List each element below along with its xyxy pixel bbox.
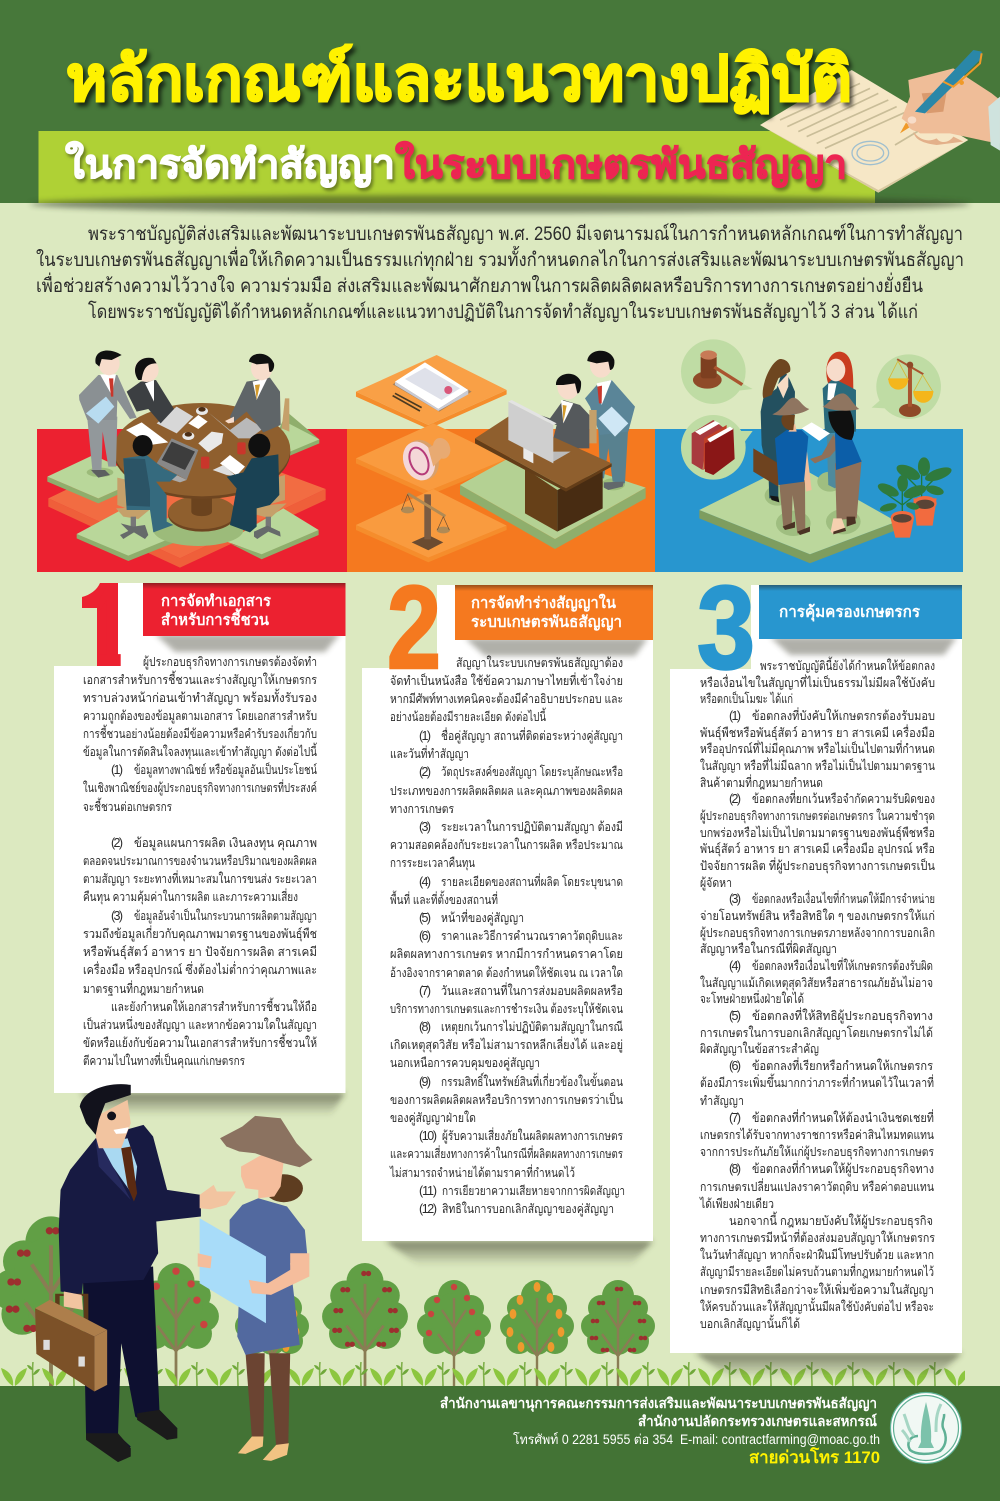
- panel 2 body text: บริการทางการเกษตรและการชำระเงิน ต้องระบุให้ชัดเจน: [390, 1002, 623, 1017]
- seated man, right: [227, 434, 287, 539]
- panel 1 body text: มาตรฐานที่กฎหมายกำหนด: [83, 980, 204, 996]
- panel 3 body text: พระราชบัญญัตินี้ยังได้กำหนดให้ข้อตกลง: [760, 656, 935, 673]
- panel 2 body text: [389, 656, 625, 1217]
- panel 3 body text: ได้เพียงฝ่ายเดียว: [699, 1197, 774, 1211]
- papers and laptops on table: [126, 407, 263, 482]
- panel 3 body text: หรือเงื่อนไขในสัญญาที่ไม่เป็นธรรมไม่มีผลใช้บังคับ: [700, 674, 935, 690]
- seated man, left: [116, 435, 177, 539]
- panel 1 body text: หรือพันธุ์สัตว์ อาหาร ยา ปัจจัยการผลิต สารเคมี: [83, 945, 317, 960]
- contract paper and writing hand: [760, 50, 1000, 193]
- panel 3 body text: พันธุ์พืชหรือพันธุ์สัตว์ อาหาร ยา สารเคมี เครื่องมือ: [700, 724, 935, 741]
- illustration: desk workers and farmers: [460, 339, 953, 563]
- panel 3 body text: ผู้จัดหา: [700, 876, 732, 891]
- document platform: [356, 355, 507, 429]
- panel 2 body text: หากมีศัพท์ทางเทคนิคจะต้องมีคำอธิบายประกอบ และ: [390, 692, 623, 706]
- panel 3 body text: (4): [729, 959, 741, 973]
- panel 1 body text: เอกสารสำหรับการชี้ชวนและร่างสัญญาให้เกษตรกร: [83, 670, 317, 687]
- face: [241, 1155, 284, 1198]
- panel 1 body text: ขัดหรือแย้งกับข้อความในเอกสารสำหรับการชี้ชวนให้: [83, 1033, 317, 1050]
- panel 3 body text: จากการประกันภัยให้แก่ผู้ประกอบธุรกิจทางการเกษตร: [700, 1145, 934, 1160]
- panel 3 body text: ต้องมีภาระเพิ่มขึ้นมากกว่าภาระที่กำหนดไว้ในเวลาที่: [700, 1073, 934, 1090]
- panel 3 body text: [699, 656, 935, 1331]
- panel 3 body text: (8): [729, 1162, 741, 1176]
- panel 3 body text: เกษตรกรได้รับจากทางราชการหรือค่าสินไหมทดแทน: [700, 1128, 934, 1142]
- pear tree: [500, 1280, 574, 1386]
- panel 2 body text: (3): [419, 820, 431, 834]
- title: หลักเกณฑ์และแนวทางปฏิบัติ: [66, 44, 852, 114]
- panel 2 body text: (6): [419, 929, 431, 943]
- panel 2 header: [455, 585, 653, 656]
- panel 3 body text: (5): [729, 1009, 741, 1023]
- panel 2 body text: (11): [419, 1184, 437, 1198]
- orange under-platform: [48, 435, 326, 568]
- face: [80, 1084, 131, 1148]
- panel 3 body text: (7): [729, 1111, 741, 1125]
- panel 2 body text: จัดทำเป็นหนังสือ ใช้ข้อความภาษาไทยที่เข้าใจง่าย: [390, 672, 623, 688]
- gesturing hand: [200, 1185, 236, 1209]
- panel 3 body text: หรืออุปกรณ์ที่ไม่มีคุณภาพ หรือไม่เป็นไปตามที่กำหนด: [700, 740, 935, 757]
- panel 3 body text: นอกจากนี้ กฎหมายบังคับให้ผู้ประกอบธุรกิจ: [729, 1211, 933, 1229]
- apple tree: [417, 1280, 491, 1386]
- panel 2 body text: อย่างน้อยต้องมีรายละเอียด ดังต่อไปนี้: [390, 707, 546, 724]
- red-haired woman: [823, 352, 856, 488]
- panel 2 body text: (1): [419, 729, 431, 743]
- panel 3 body text: จ่ายโอนทรัพย์สิน หรือสิทธิใด ๆ ของเกษตรกรให้แก่: [700, 908, 935, 923]
- businessman with briefcase: [35, 1084, 236, 1462]
- panel 2 body text: ราคาและวิธีการคำนวณราคาวัตถุดิบและ: [441, 929, 623, 944]
- number 2: 2: [387, 562, 441, 694]
- panel 1 body text: การชี้ชวนอย่างน้อยต้องมีข้อความหรือคำรับรองเกี่ยวกับ: [83, 724, 317, 741]
- panel 2 body text: (7): [419, 984, 431, 998]
- speech bubble: gavel: [681, 339, 753, 404]
- cherry tree: [581, 1280, 655, 1386]
- male farmer: [772, 398, 812, 535]
- potted plants: [876, 457, 953, 538]
- panel 3 header: การคุ้มครองเกษตรกร: [779, 603, 921, 622]
- colour bands behind illustrations: [37, 429, 963, 572]
- panel 2 header: การจัดทำร่างสัญญาใน: [471, 593, 616, 612]
- man in grey suit, right: [225, 354, 289, 432]
- panel 2 body text: พื้นที่ และที่ตั้งของสถานที่: [390, 890, 498, 907]
- panel 2 body text: (2): [419, 765, 431, 779]
- panel 1 body text: ตีความไปในทางที่เป็นคุณแก่เกษตรกร: [83, 1052, 245, 1069]
- panel 3 body text: ข้อตกลงที่ให้สิทธิผู้ประกอบธุรกิจทาง: [752, 1007, 933, 1024]
- female farmer: [810, 393, 862, 534]
- blue paper: [200, 1218, 266, 1323]
- panel 2 body text: ชื่อคู่สัญญา สถานที่ติดต่อระหว่างคู่สัญญา: [441, 727, 623, 744]
- panel 1 body text: (2): [111, 836, 123, 850]
- panel 2 body text: (12): [419, 1202, 437, 1216]
- panel 1 body text: ตลอดจนประมาณการของจำนวนหรือปริมาณของผลิตผล: [83, 854, 317, 868]
- cherry tree: [322, 1263, 408, 1386]
- orchard trees: [0, 1216, 655, 1386]
- footer text: สายด่วนโทร 1170: [749, 1447, 880, 1467]
- speech bubble: law books: [681, 415, 753, 480]
- panel 3 body text: (1): [729, 709, 741, 723]
- apple tree: [133, 1263, 219, 1386]
- panel 3 body text: (3): [729, 892, 741, 906]
- panel 1 body text: ตามสัญญา ระยะทางที่เหมาะสมในการขนส่ง ระยะเวลา: [83, 870, 317, 886]
- footer text: สำนักงานเลขานุการคณะกรรมการส่งเสริมและพัฒนาระบบเกษตรพันธสัญญา: [440, 1395, 877, 1412]
- panel shadows: [80, 1093, 962, 1378]
- panel 1 body text: [83, 655, 317, 1069]
- panel 1 body text: จะชี้ชวนต่อเกษตรกร: [83, 797, 172, 814]
- shoes: [86, 1410, 177, 1462]
- panel 1 body text: ข้อมูลอันจำเป็นในกระบวนการผลิตตามสัญญา: [134, 908, 317, 924]
- shirt and tie: [96, 1138, 137, 1202]
- number 1: [82, 561, 122, 691]
- illustration: meeting around round table and orange platforms: [47, 350, 507, 568]
- panel 3 body text: (6): [729, 1059, 741, 1073]
- panel 3 body text: ข้อตกลงที่กำหนดให้ผู้ประกอบธุรกิจทาง: [752, 1160, 934, 1177]
- panel 2 body text: เหตุยกเว้นการไม่ปฏิบัติตามสัญญาในกรณี: [441, 1020, 623, 1035]
- panel 1 body text: ในเชิงพาณิชย์ของผู้ประกอบธุรกิจทางการเกษตรที่ประสงค์: [83, 779, 317, 796]
- panel 2 body text: (8): [419, 1020, 431, 1034]
- panel 2 body text: วันและสถานที่ในการส่งมอบผลิตผลหรือ: [441, 982, 623, 998]
- panel 1 body text: ข้อมูลทางพาณิชย์ หรือข้อมูลอันเป็นประโยชน์: [134, 762, 317, 778]
- seated man at desk: [535, 374, 597, 453]
- panel 2 body text: การระยะเวลาคืนทุน: [390, 856, 475, 871]
- panel 2 body text: (4): [419, 875, 431, 889]
- arms: [198, 1253, 309, 1295]
- panel 2 body text: รายละเอียดของสถานที่ผลิต โดยระบุขนาด: [441, 873, 623, 890]
- panel 3 body text: ข้อตกลงที่กำหนดให้ต้องนำเงินชดเชยที่: [752, 1109, 934, 1125]
- band shadow: [30, 195, 970, 213]
- hat: [220, 1116, 313, 1167]
- panel 3 body text: ผิดสัญญาในข้อสาระสำคัญ: [700, 1042, 819, 1056]
- desk platform: [460, 448, 646, 549]
- panel 3 body text: ในสัญญาแม้เกิดเหตุสุดวิสัยหรือสาธารณภัยอันไม่อาจ: [700, 976, 933, 991]
- footer text: สำนักงานปลัดกระทรวงเกษตรและสหกรณ์: [638, 1413, 877, 1429]
- hair bun: [265, 1174, 303, 1202]
- panel 2 body text: วัตถุประสงค์ของสัญญา โดยระบุลักษณะหรือ: [441, 764, 623, 780]
- panel 3 body text: การเกษตรเปลี่ยนแปลงราคาวัตถุดิบ หรือค่าตอบแทน: [700, 1178, 934, 1195]
- panel 3 body text: สัญญามีรายละเอียดไม่ครบถ้วนตามที่กฎหมายกำหนดไว้: [700, 1263, 934, 1279]
- panel 2 body text: และวันที่ทำสัญญา: [390, 745, 469, 761]
- farmer woman with blue paper: [198, 1116, 313, 1461]
- footer text: [440, 1395, 880, 1467]
- panel 2 body text: ไม่สามารถจำหน่ายได้ตามราคาที่กำหนดไว้: [389, 1164, 575, 1180]
- panel 3 body text: หรือตกเป็นโมฆะ ได้แก่: [700, 691, 793, 706]
- panel 2 body text: ผลิตผลทางการเกษตร หากมีการกำหนดราคาโดย: [390, 946, 623, 961]
- briefcase: [35, 1292, 107, 1392]
- panel 1 body text: เครื่องมือ หรืออุปกรณ์ ซึ่งต้องไม่ต่ำกว่าคุณภาพและ: [83, 961, 317, 978]
- panel 2 header: ระบบเกษตรพันธสัญญา: [471, 614, 622, 631]
- panel 3 header: [759, 585, 962, 655]
- seedling row: [0, 1362, 965, 1386]
- panel 3 body text: บอกเลิกสัญญานั้นก็ได้: [700, 1314, 800, 1331]
- jacket: [59, 1125, 201, 1295]
- panel 3 body text: ทำสัญญา: [700, 1094, 744, 1108]
- panel 2 body text: ความสอดคล้องกับระยะเวลาในการผลิต หรือประมาณ: [390, 838, 623, 852]
- panel 3 body text: ในวันทำสัญญา หากก็จะฝ่าฝืนมีโทษปรับด้วย และหาก: [700, 1247, 934, 1262]
- subtitle white part: ในการจัดทำสัญญา: [65, 141, 395, 188]
- panel 3: farmer protection: [670, 562, 962, 1353]
- panel 3 body text: สัญญาหรือในกรณีที่ผิดสัญญา: [700, 940, 837, 956]
- panel 2 body text: (5): [419, 911, 431, 925]
- panel 1 header: สำหรับการชี้ชวน: [161, 608, 269, 629]
- panel 3 body text: บกพร่องหรือไม่เป็นไปตามมาตรฐานของพันธุ์พืชหรือ: [700, 825, 935, 841]
- panel 3 body text: สินค้าตามที่กฎหมายกำหนด: [700, 774, 823, 790]
- stamp platform: [356, 423, 507, 496]
- panel 3 sheet: [670, 585, 962, 1353]
- footer band: [0, 1386, 1000, 1501]
- standing man with folder: [79, 350, 137, 478]
- round table: [114, 403, 290, 532]
- speech bubble: gold scales: [872, 354, 941, 419]
- panel 1 header: การจัดทำเอกสาร: [161, 592, 272, 610]
- footer text: โทรศัพท์ 0 2281 5955 ต่อ 354 E-mail: contractfarming@moac.go.th: [513, 1431, 880, 1447]
- panel 1 body text: ผู้ประกอบธุรกิจทางการเกษตรต้องจัดทำ: [143, 655, 317, 670]
- scales platform: [356, 489, 507, 562]
- businesswoman with briefcase: [753, 359, 795, 502]
- panel 2 body text: สัญญาในระบบเกษตรพันธสัญญาต้อง: [456, 656, 623, 670]
- panel 2 body text: หน้าที่ของคู่สัญญา: [441, 909, 524, 926]
- farmers platform: [699, 463, 897, 563]
- panel 2 body text: สิทธิในการบอกเลิกสัญญาของคู่สัญญา: [442, 1202, 614, 1217]
- panel 2 body text: ผู้รับความเสี่ยงภัยในผลิตผลทางการเกษตร: [442, 1127, 623, 1144]
- panel 1 body text: ทราบล่วงหน้าก่อนเข้าทำสัญญา พร้อมทั้งรับรอง: [83, 688, 317, 705]
- panel 1: documents for solicitation: [54, 561, 346, 1093]
- panel 3 body text: (2): [729, 792, 741, 806]
- panel 2 body text: กรรมสิทธิ์ในทรัพย์สินที่เกี่ยวข้องในขั้นตอน: [441, 1072, 623, 1089]
- trousers: [83, 1267, 177, 1462]
- panel 3 body text: ข้อตกลงที่บังคับให้เกษตรกรต้องรับมอบ: [752, 707, 935, 723]
- panel 2 body text: เกิดเหตุสุดวิสัย หรือไม่สามารถหลีกเลี่ยงได้ และอยู่: [390, 1036, 623, 1053]
- header band: [0, 0, 1000, 203]
- panel 1 sheet: [54, 583, 346, 1093]
- computer desk: [475, 400, 612, 532]
- panel 2 body text: (9): [419, 1075, 431, 1089]
- panel 1 header: [143, 583, 346, 652]
- panel 1 body text: และยังกำหนดให้เอกสารสำหรับการชี้ชวนให้ถือ: [111, 997, 317, 1014]
- panel 1: documents for solicitation: 1: [96, 561, 122, 691]
- orange tree behind farmer: [235, 1280, 309, 1386]
- panel 1 body text: เป็นส่วนหนึ่งของสัญญา และหากข้อความใดในสัญญา: [83, 1016, 317, 1032]
- panel 2 sheet: [362, 585, 653, 1241]
- panel 2 body text: ของการผลิตผลิตผลหรือบริการทางการเกษตรว่าเป็น: [390, 1092, 623, 1107]
- panel 2 body text: ทางการเกษตร: [390, 802, 454, 816]
- panel 3 body text: ข้อตกลงที่ยกเว้นหรือจำกัดความรับผิดของ: [752, 790, 935, 806]
- intro paragraph: [36, 223, 964, 323]
- panel 1 body text: คืนทุน ความคุ้มค่าในการผลิต และภาระความเสี่ยง: [83, 888, 298, 905]
- panel 1 body text: ข้อมูลแผนการผลิต เงินลงทุน คุณภาพ: [134, 836, 317, 851]
- panel 2: drafting the contract: [362, 562, 653, 1241]
- panel 1 body text: ความถูกต้องของข้อมูลตามเอกสาร โดยเอกสารสำหรับ: [83, 708, 317, 724]
- green platforms: [47, 412, 319, 561]
- subtitle red part: ในระบบเกษตรพันธสัญญา: [395, 141, 847, 188]
- panel 3 body text: ข้อตกลงหรือเงื่อนไขที่กำหนดให้มีการจำหน่าย: [752, 890, 935, 906]
- cherry tree far left: [0, 1216, 110, 1386]
- standing man at desk: [585, 351, 635, 490]
- dress: [230, 1198, 307, 1355]
- ministry seal: [890, 1392, 962, 1464]
- panel 1 body text: รวมถึงข้อมูลเกี่ยวกับคุณภาพมาตรฐานของพันธุ์พืช: [83, 925, 317, 942]
- panel 1 body text: ข้อมูลในการตัดสินใจลงทุนและเข้าทำสัญญา ดังต่อไปนี้: [83, 742, 317, 760]
- panel 3 body text: ผู้ประกอบธุรกิจทางการเกษตรต่อเกษตรกร ในความชำรุด: [700, 809, 935, 824]
- panel 2 body text: อ้างอิงจากราคาตลาด ต้องกำหนดให้ชัดเจน ณ เวลาใด: [390, 966, 623, 980]
- panel 3 body text: การเกษตรในการบอกเลิกสัญญาโดยเกษตรกรไม่ได้: [700, 1025, 933, 1040]
- panel 2 body text: (10): [419, 1129, 437, 1143]
- panel 1 body text: (1): [111, 763, 123, 777]
- panel 2 body text: และความเสี่ยงทางการค้าในกรณีที่ผลิตผลทางการเกษตร: [390, 1145, 623, 1161]
- panel 3 body text: พันธุ์สัตว์ อาหาร ยา สารเคมี เครื่องมือ อุปกรณ์ หรือ: [700, 840, 935, 857]
- panel 2 body text: ระยะเวลาในการปฏิบัติตามสัญญา ต้องมี: [441, 820, 623, 834]
- number 3: 3: [697, 562, 755, 694]
- panel 2 body text: ประเภทของการผลิตผลิตผล และคุณภาพของผลิตผล: [390, 784, 623, 799]
- subtitle: [65, 141, 847, 188]
- legs: [238, 1353, 290, 1461]
- panel 3 body text: จะโทษฝ่ายหนึ่งฝ่ายใดได้: [700, 990, 804, 1006]
- panel 3 body text: ข้อตกลงหรือเงื่อนไขที่ให้เกษตรกรต้องรับผิด: [752, 957, 933, 973]
- subtitle bar: [38, 131, 875, 203]
- panel 3 body text: ทางการเกษตรมีหน้าที่ต้องส่งมอบสัญญาให้เกษตรกร: [700, 1229, 935, 1245]
- panel 3 body text: เกษตรกรมีสิทธิเลือกว่าจะให้เพิ่มข้อความในสัญญา: [700, 1281, 934, 1297]
- panel 2 body text: การเยียวยาความเสียหายจากการผิดสัญญา: [442, 1184, 625, 1198]
- panel 2 body text: นอกเหนือการควบคุมของคู่สัญญา: [390, 1056, 540, 1071]
- panel 3 body text: ผู้ประกอบธุรกิจทางการเกษตรภายหลังจากการบอกเลิก: [700, 926, 935, 941]
- contract being exchanged: [802, 422, 830, 441]
- panel 2 body text: ของคู่สัญญาฝ่ายใด: [390, 1111, 476, 1126]
- panel 3 body text: ให้ครบถ้วนและให้สัญญานั้นมีผลใช้บังคับต่อไป หรือจะ: [700, 1297, 934, 1314]
- panel 3 body text: ข้อตกลงที่เรียกหรือกำหนดให้เกษตรกร: [752, 1057, 933, 1073]
- woman in dark blazer: [127, 358, 174, 423]
- panel 3 body text: ในสัญญา หรือที่ไม่มีฉลาก หรือไม่เป็นไปตามมาตรฐาน: [700, 757, 935, 773]
- panel 3 body text: ปัจจัยการผลิต ที่ผู้ประกอบธุรกิจทางการเกษตรเป็น: [700, 857, 935, 874]
- panel 1 body text: (3): [111, 909, 123, 923]
